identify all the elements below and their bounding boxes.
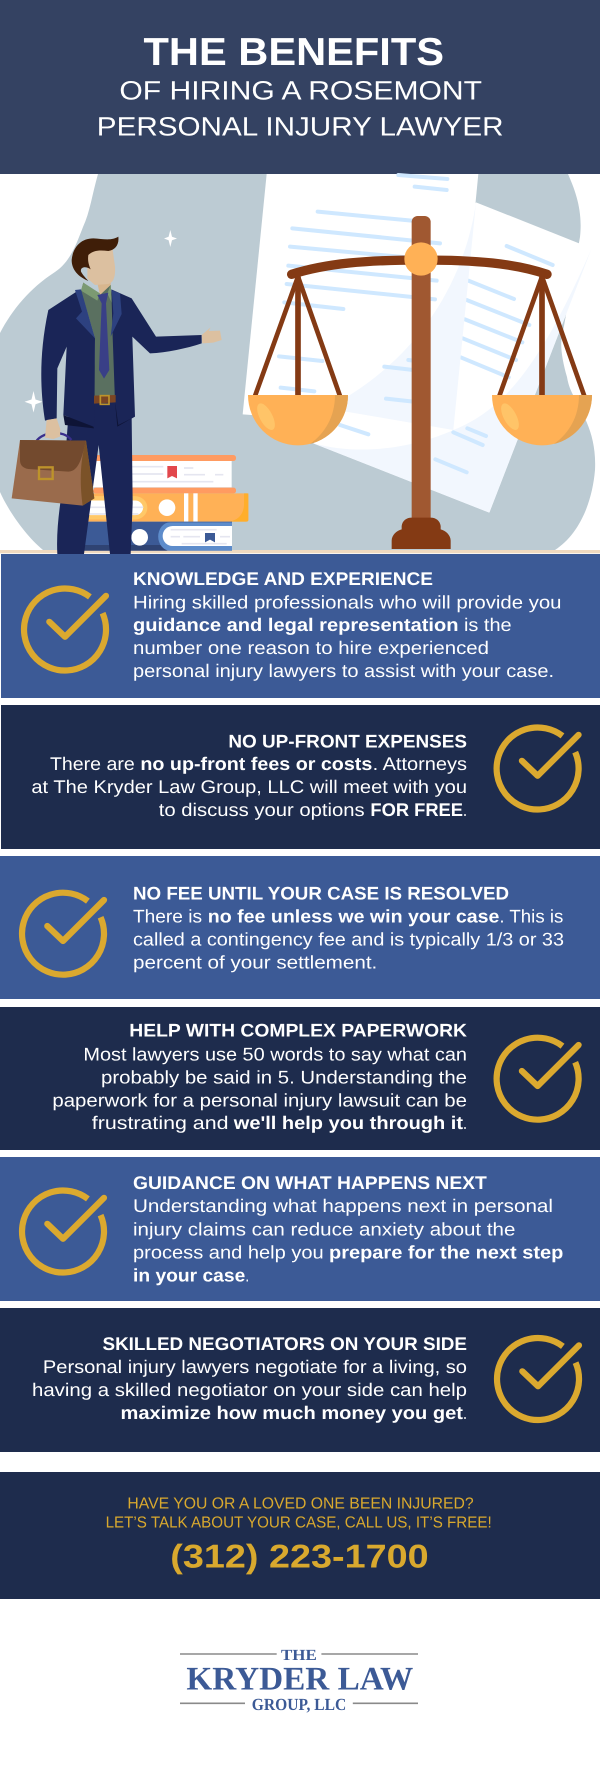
body text: FOR FREE (370, 799, 463, 820)
icon: check circle (22, 893, 104, 975)
body text: to discuss your options (159, 799, 365, 820)
body text (133, 906, 564, 973)
body text: number one reason to hire experienced (133, 637, 489, 658)
neck and head (97, 280, 111, 295)
title: THE BENEFITS (144, 31, 444, 74)
body text: process and help you (133, 1241, 324, 1262)
figure: lawyer with briefcase (12, 237, 222, 554)
title (97, 31, 504, 142)
heading: KNOWLEDGE AND EXPERIENCE (133, 568, 433, 589)
jacket (41, 289, 95, 427)
base (392, 518, 451, 549)
logo: The Kryder Law Group, LLC: THE (281, 1647, 317, 1664)
sparkles (24, 230, 177, 412)
body text: maximize how much money you get (120, 1402, 463, 1423)
call to action text: HAVE YOU OR A LOVED ONE BEEN INJURED? (127, 1495, 474, 1512)
pivot (404, 242, 438, 276)
phone number: (312) 223-1700 (170, 1537, 429, 1574)
logo: The Kryder Law Group, LLC: GROUP, LLC (252, 1695, 346, 1714)
shirt (81, 283, 116, 397)
left pan (248, 395, 348, 445)
heading: HELP WITH COMPLEX PAPERWORK (129, 1020, 468, 1041)
ground line (0, 550, 600, 553)
body text: Personal injury lawyers negotiate for a living, so (43, 1356, 467, 1377)
icon: check circle (497, 727, 579, 809)
briefcase (12, 440, 94, 506)
body text: Most lawyers use 50 words to say what can (83, 1043, 467, 1064)
body text: frustrating and (92, 1112, 228, 1133)
call to action text: LET’S TALK ABOUT YOUR CASE, CALL US, IT’S FREE! (106, 1514, 492, 1531)
title: OF HIRING A ROSEMONT (119, 75, 482, 105)
body text: we'll help you through it (233, 1112, 463, 1133)
body text: no up-front fees or costs (140, 753, 372, 774)
legal papers (243, 174, 592, 513)
icon: check circle (24, 588, 106, 670)
icon: check circle (22, 1190, 104, 1272)
body text: prepare for the next step (329, 1241, 563, 1262)
belt (94, 395, 116, 404)
call to action text (106, 1495, 492, 1531)
heading: NO UP-FRONT EXPENSES (228, 730, 467, 751)
body text: There is (133, 906, 202, 927)
body text: There are (50, 753, 135, 774)
body text: . (463, 799, 467, 820)
panel: skilled negotiators on your side (0, 1308, 600, 1452)
body text: . (245, 1264, 249, 1285)
tie (97, 293, 109, 379)
logo: The Kryder Law Group, LLC: KRYDER LAW (186, 1661, 413, 1697)
panel: no up-front expenses (1, 705, 600, 849)
trousers (57, 400, 133, 554)
body text: percent of your settlement. (133, 952, 377, 973)
right pan (492, 395, 592, 445)
body text: . This is (499, 906, 563, 927)
briefcase handle (37, 433, 71, 441)
header banner (0, 0, 600, 174)
post (412, 216, 431, 526)
right strings (499, 277, 584, 396)
background blob (0, 174, 595, 550)
panel: knowledge and experience (1, 554, 600, 698)
left strings (255, 277, 340, 396)
body text (133, 1195, 563, 1285)
body text: . Attorneys (373, 753, 467, 774)
body text: Understanding what happens next in personal (133, 1195, 553, 1216)
lapels (75, 289, 122, 338)
beam (292, 260, 547, 274)
body text: no fee unless we win your case (208, 906, 499, 927)
heading: SKILLED NEGOTIATORS ON YOUR SIDE (102, 1333, 467, 1354)
body text (52, 1043, 467, 1133)
body text: Hiring skilled professionals who will provide you (133, 591, 562, 612)
body text (31, 753, 467, 820)
call to action banner (0, 1472, 600, 1599)
hero illustration (0, 174, 600, 554)
stack of books (80, 455, 248, 551)
heading: NO FEE UNTIL YOUR CASE IS RESOLVED (133, 883, 509, 904)
logo: The Kryder Law Group, LLC (180, 1647, 418, 1714)
hair (72, 237, 118, 281)
scale of justice (248, 216, 592, 549)
body text: injury claims can reduce anxiety about the (133, 1218, 515, 1239)
body text: is the (464, 614, 512, 635)
body text: at The Kryder Law Group, LLC will meet with you (31, 776, 467, 797)
heading: GUIDANCE ON WHAT HAPPENS NEXT (133, 1172, 487, 1193)
left hand (45, 418, 60, 439)
body text: having a skilled negotiator on your side can help (32, 1379, 467, 1400)
title: PERSONAL INJURY LAWYER (97, 112, 504, 142)
body text (32, 1356, 467, 1423)
body text: . (463, 1112, 467, 1133)
icon: check circle (497, 1038, 579, 1120)
body text: . (463, 1402, 467, 1423)
body text: paperwork for a personal injury lawsuit can be (52, 1089, 467, 1110)
body text: probably be said in 5. Understanding the (101, 1066, 467, 1087)
body text: in your case (133, 1264, 245, 1285)
body text: called a contingency fee and is typically 1/3 or 33 (133, 929, 564, 950)
body text (133, 591, 562, 681)
right hand (202, 327, 222, 343)
body text: guidance and legal representation (133, 614, 458, 635)
panel: no fee until your case is resolved (0, 856, 600, 999)
panel: help with complex paperwork (0, 1007, 600, 1150)
icon: check circle (497, 1338, 579, 1420)
panel: guidance on what happens next (0, 1157, 600, 1301)
body text: personal injury lawyers to assist with your case. (133, 660, 554, 681)
